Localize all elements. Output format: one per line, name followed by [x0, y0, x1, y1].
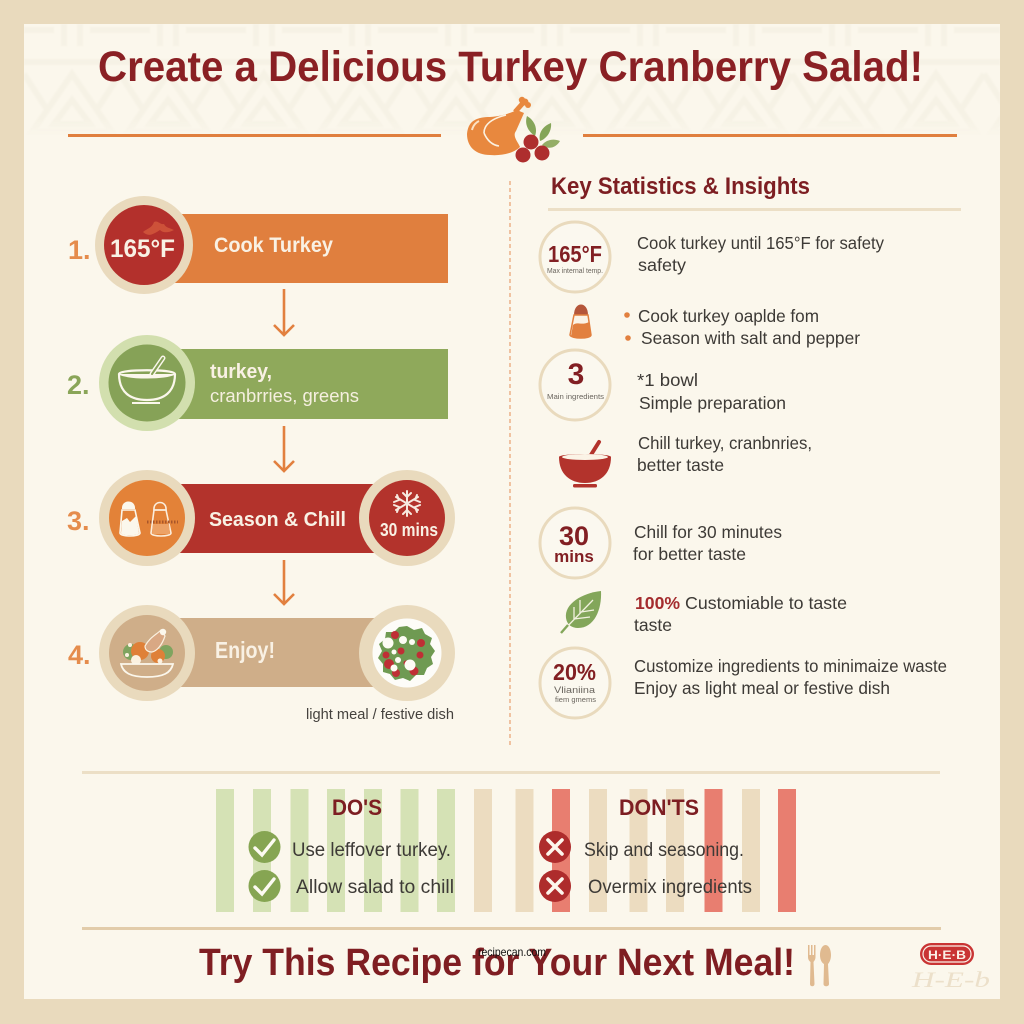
arrow 1 [274, 289, 294, 335]
step 3 badge: shakers [99, 470, 195, 566]
stat: leaf: taste [634, 615, 672, 635]
stat: 165F: safety [638, 255, 686, 275]
step 4 label: Enjoy! [215, 637, 275, 663]
step 2: combine [67, 335, 448, 431]
panel: key statistics [540, 173, 961, 718]
do item 1 [248, 831, 451, 863]
arrow 2 [274, 426, 294, 471]
stat: 20 percent [540, 648, 947, 718]
stripes [216, 789, 796, 912]
stat: leaf: 100% [635, 593, 680, 613]
icon: turkey and cranberries [467, 97, 560, 162]
stat: 165F: 165°F [548, 241, 602, 267]
stat: 30 mins [540, 508, 782, 578]
stat: 3 ingredients: Simple preparation [639, 393, 786, 413]
stat: 30 mins: for better taste [633, 544, 746, 564]
do item 2 [248, 870, 454, 902]
don't item 2: Overmix ingredients [588, 877, 752, 898]
stat: 3 ingredients: *1 bowl [637, 370, 698, 390]
stat: 30 mins: 30 [559, 521, 589, 551]
stat: 20 percent: fiem gmems [555, 695, 596, 704]
stat: 20 percent: Vlianiina [554, 685, 596, 696]
stat: 20 percent: 20% [553, 659, 596, 685]
stat: leaf: Customiable to taste [685, 593, 847, 613]
logo: H-E-B [911, 943, 990, 992]
icon: fork and spoon [808, 945, 831, 986]
header divider left [68, 134, 441, 137]
column divider [509, 181, 511, 747]
stat: 3 ingredients: 3 [568, 358, 584, 391]
header pattern [24, 24, 1000, 136]
watermark: recipecan.com [478, 945, 546, 959]
step 2 badge [99, 335, 195, 431]
step 4 badge: plated turkey [99, 605, 195, 701]
stat: bowl: Chill turkey, cranbnries, [638, 433, 812, 453]
logo: H-E-B: H·E·B [928, 948, 966, 962]
step 3: season and chill [67, 470, 455, 566]
don'ts heading: DON'TS [619, 795, 699, 820]
step 4 caption: light meal / festive dish [306, 706, 454, 723]
stat: salt shaker: Season with salt and pepper [641, 328, 860, 348]
stat: 20 percent: Enjoy as light meal or festive dish [634, 678, 890, 698]
stat: leaf [561, 591, 847, 635]
title: Create a Delicious Turkey Cranberry Salad! [98, 43, 923, 91]
don't item 1: Skip and seasoning. [584, 840, 744, 861]
stat: salt shaker [570, 304, 860, 348]
panel: do's and don'ts [216, 789, 796, 912]
stat: 165F: Cook turkey until 165°F for safety [637, 233, 884, 253]
header divider right [583, 134, 957, 137]
step 1 badge: 165°F [110, 235, 175, 263]
step 3 badge: chill time [359, 470, 455, 566]
step 1 label: Cook Turkey [214, 234, 333, 257]
rule above footer [82, 927, 941, 930]
step 4: enjoy [68, 605, 455, 723]
step 4 bar [180, 618, 390, 687]
step 1 badge [95, 196, 193, 294]
step 4 badge: salad [359, 605, 455, 701]
step 2 number: 2. [67, 370, 90, 400]
step 3 number: 3. [67, 506, 90, 536]
stat: 3 ingredients: Main ingredients [547, 392, 604, 401]
step 4 number: 4. [68, 640, 91, 670]
stat: bowl [559, 433, 812, 488]
step 3 label: Season & Chill [209, 508, 346, 531]
logo: H-E-B: H-E-b [911, 967, 990, 992]
step 1 bar [170, 214, 448, 283]
do's heading: DO'S [332, 795, 382, 820]
step 1 number: 1. [68, 235, 91, 265]
do item 2: Allow salad to chill [296, 877, 454, 898]
statistics heading: Key Statistics & Insights [551, 173, 810, 200]
do item 1: Use leffover turkey. [292, 840, 451, 861]
don't item 2 [539, 870, 752, 902]
rule above do's and don'ts [82, 771, 940, 774]
stat: 165F: Max internal temp. [547, 268, 603, 275]
step 2 bar [175, 349, 448, 419]
footer call to action: Try This Recipe for Your Next Meal! [199, 942, 795, 984]
step 2 label: cranbrries, greens [210, 385, 359, 406]
step 2 label: turkey, [210, 361, 272, 383]
heading rule [548, 208, 961, 211]
stat: salt shaker: Cook turkey oaplde fom [638, 306, 819, 326]
stat: 30 mins: Chill for 30 minutes [634, 522, 782, 542]
stat: 20 percent: Customize ingredients to minimaize waste [634, 656, 947, 676]
step 3 bar [180, 484, 390, 553]
stat: 30 mins: mins [554, 547, 594, 566]
step 3 badge: chill time: 30 mins [380, 520, 438, 540]
arrow 3 [274, 560, 294, 604]
stat: 3 ingredients [540, 350, 786, 420]
step 2 label [210, 361, 359, 406]
stat: bowl: better taste [637, 455, 724, 475]
step 1: cook turkey [68, 196, 448, 294]
don't item 1 [539, 831, 744, 863]
stat: 165F [540, 222, 884, 292]
